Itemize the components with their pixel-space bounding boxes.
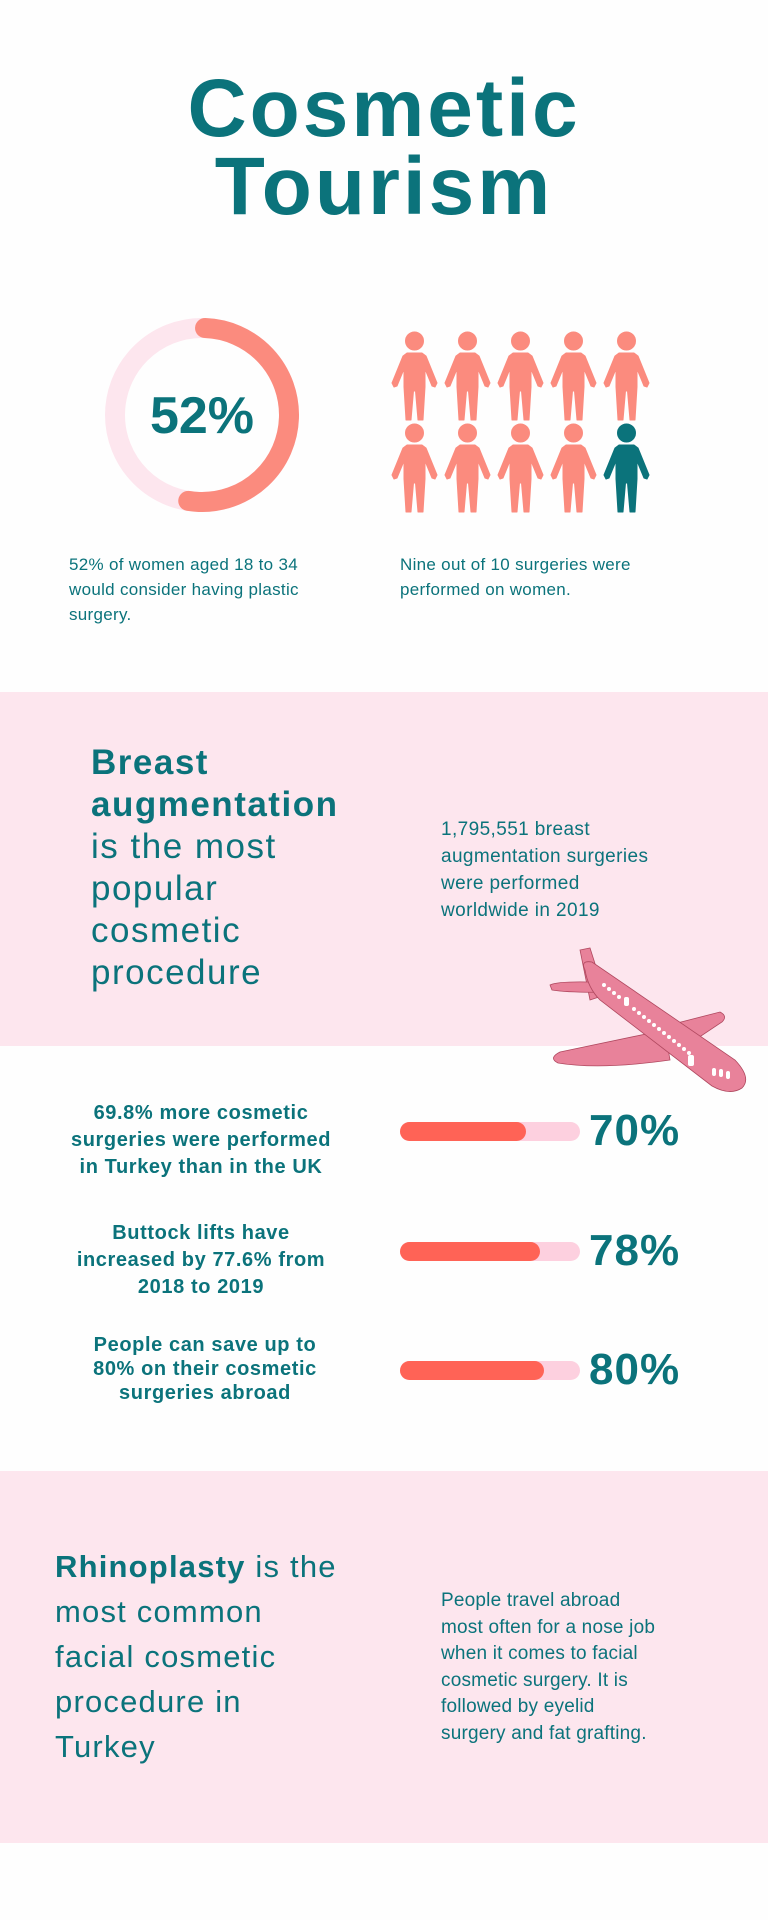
heading: breast augmentation: procedure <box>91 953 262 992</box>
heading: breast augmentation: augmentation <box>91 785 338 824</box>
row 3 text: surgeries abroad <box>119 1382 291 1404</box>
heading: rhinoplasty: most common <box>55 1594 263 1629</box>
heading: breast augmentation: cosmetic <box>91 911 241 950</box>
row 3 text: 80% on their cosmetic <box>93 1358 317 1380</box>
row 1 value: 70% <box>589 1106 680 1155</box>
title: Cosmetic <box>187 63 581 154</box>
panel: rhinoplasty <box>0 1471 768 1843</box>
description text <box>441 1590 655 1744</box>
row 2 text: Buttock lifts have <box>112 1222 290 1244</box>
caption: nine out of 10 <box>400 555 631 599</box>
description text: People travel abroad <box>441 1590 620 1611</box>
stat text: augmentation surgeries <box>441 846 648 867</box>
row 1 text: surgeries were performed <box>71 1129 331 1151</box>
heading: breast augmentation: Breast <box>91 743 209 782</box>
stat text: 1,795,551 breast <box>441 819 590 840</box>
row 1 text: in Turkey than in the UK <box>80 1156 322 1178</box>
stat row 3: savings <box>93 1334 680 1404</box>
stat row 1: Turkey vs UK <box>71 1102 680 1178</box>
heading: rhinoplasty: procedure in <box>55 1684 242 1719</box>
stat text: were performed <box>441 873 580 894</box>
description text: surgery and fat grafting. <box>441 1723 647 1744</box>
icon: plane <box>550 948 746 1092</box>
row 1 text: 69.8% more cosmetic <box>94 1102 308 1124</box>
stat text <box>441 819 648 921</box>
row 3 text <box>93 1334 317 1404</box>
row 3 value: 80% <box>589 1345 680 1394</box>
stat row 2: buttock lifts <box>77 1222 680 1298</box>
row 2 text <box>77 1222 325 1298</box>
heading: rhinoplasty: Turkey <box>55 1729 156 1764</box>
row 3 bar <box>400 1361 580 1380</box>
panel: breast augmentation <box>0 692 768 1046</box>
stat text: worldwide in 2019 <box>441 900 600 921</box>
caption: 52% women: 52% of women aged 18 to 34 <box>69 555 298 574</box>
row 2 text: 2018 to 2019 <box>138 1276 264 1298</box>
row 1 text <box>71 1102 331 1178</box>
title <box>187 63 581 232</box>
title: Tourism <box>215 141 553 232</box>
row 2 text: increased by 77.6% from <box>77 1249 325 1271</box>
row 2 value: 78% <box>589 1226 680 1275</box>
donut label: 52% <box>150 387 254 445</box>
heading: breast augmentation: is the most <box>91 827 277 866</box>
heading: breast augmentation: popular <box>91 869 218 908</box>
caption: 52% women: surgery. <box>69 605 132 624</box>
description text: followed by eyelid <box>441 1696 595 1717</box>
caption: nine out of 10: Nine out of 10 surgeries were <box>400 555 631 574</box>
row 3 text: People can save up to <box>94 1334 316 1356</box>
heading: breast augmentation <box>91 743 338 992</box>
heading: rhinoplasty: Rhinoplasty is the <box>55 1549 337 1584</box>
caption: nine out of 10: performed on women. <box>400 580 571 599</box>
description text: cosmetic surgery. It is <box>441 1670 628 1691</box>
heading: rhinoplasty: facial cosmetic <box>55 1639 276 1674</box>
caption: 52% women: would consider having plastic <box>69 580 299 599</box>
description text: most often for a nose job <box>441 1617 655 1638</box>
caption: 52% women <box>69 555 299 624</box>
donut chart: 52% <box>105 318 299 512</box>
heading: rhinoplasty <box>55 1549 337 1764</box>
icon grid: 10 people <box>392 332 650 512</box>
description text: when it comes to facial <box>441 1643 638 1664</box>
row 1 bar <box>400 1122 580 1141</box>
row 2 bar <box>400 1242 580 1261</box>
